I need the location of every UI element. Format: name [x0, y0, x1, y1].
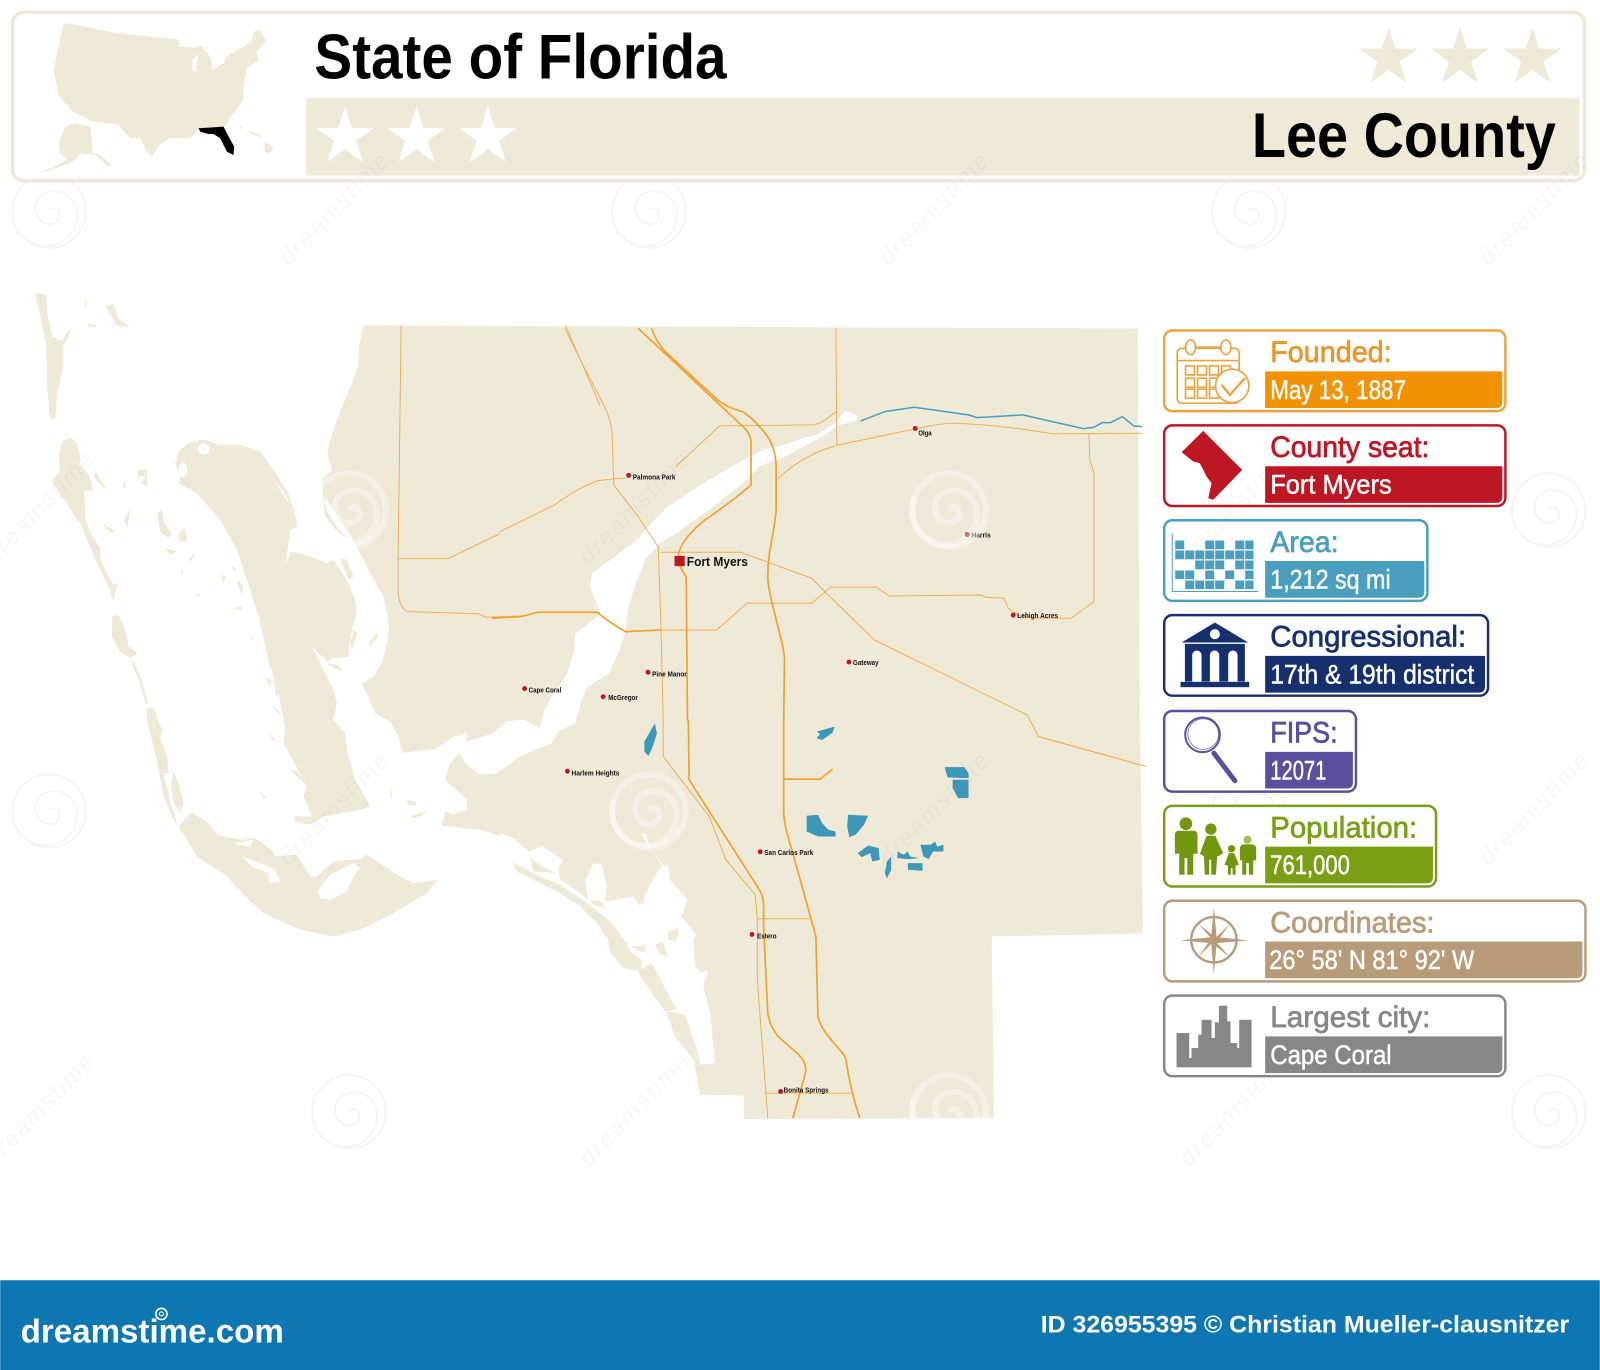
roads west: [398, 325, 600, 617]
city labels: Bonita Springs: [784, 1087, 829, 1095]
icon: calendar: [1177, 340, 1249, 403]
icon: district outline: [1182, 431, 1242, 500]
city labels: Lehigh Acres: [1017, 612, 1058, 620]
panel: Founded: [1164, 331, 1505, 411]
city: Fort Myers: Fort Myers: [687, 554, 748, 569]
stars top right: [1360, 28, 1562, 83]
county map: [35, 293, 1146, 1119]
panel: Coordinates: [1164, 901, 1585, 981]
river: blue upstream: [644, 407, 1142, 756]
value: 1,212 sq mi: [1270, 565, 1391, 595]
panel: Largest city: [1164, 996, 1505, 1076]
value: Cape Coral: [1270, 1040, 1392, 1070]
islands: small keys in Pine Island Sound: [94, 470, 426, 818]
header band: [306, 98, 1579, 175]
infographic: Lee County, Florida: dreamstime: [1174, 445, 1296, 570]
island: Sanibel: [179, 812, 438, 936]
label: Population:: [1270, 812, 1417, 845]
islands: Pine Island and Sound: [52, 437, 426, 828]
infographic: Lee County, Florida: dreamstime: [574, 445, 696, 570]
value: 12071: [1270, 755, 1326, 785]
city labels: Estero: [757, 932, 777, 940]
label: Congressional:: [1270, 621, 1466, 654]
mainland: [323, 325, 1143, 1119]
river: Caloosahatchee: [459, 411, 857, 775]
infographic: Lee County, Florida: dreamstime: [1473, 146, 1596, 271]
city labels: Palmona Park: [633, 473, 676, 481]
panel: FIPS: [1164, 711, 1356, 792]
city labels: Cape Coral: [529, 687, 561, 695]
icon: family: [1175, 817, 1256, 875]
city labels: San Carlos Park: [764, 849, 813, 857]
subtitle: Lee County: [1252, 101, 1556, 171]
panel: Area: [1164, 520, 1427, 601]
city labels: [522, 426, 1058, 1095]
roads north: [492, 328, 1142, 760]
icon: skyline: [1177, 1006, 1252, 1067]
panel: County seat: [1164, 425, 1505, 506]
label: FIPS:: [1270, 717, 1338, 750]
title: State of Florida: [314, 23, 727, 93]
islands: Gasparilla and northern keys: [35, 293, 130, 419]
label: Largest city:: [1270, 1001, 1430, 1034]
city labels: Olga: [918, 430, 932, 438]
islands: Cayo Costa chain: [52, 437, 184, 828]
value: 761,000: [1270, 850, 1350, 880]
panel: Congressional: [1164, 615, 1488, 696]
infographic: Lee County, Florida: dreamstime: [1174, 1047, 1296, 1172]
city labels: Harris: [971, 532, 991, 540]
infographic: Lee County, Florida: dreamstime: [1473, 746, 1596, 871]
header panel: [12, 12, 1584, 181]
icon: magnifying glass: [1185, 717, 1235, 781]
label: County seat:: [1270, 431, 1429, 464]
value: 26° 58' N 81° 92' W: [1269, 945, 1474, 975]
infographic: Lee County, Florida: dreamstime: [274, 746, 396, 871]
city labels: Harlem Heights: [571, 769, 619, 777]
label: Founded:: [1270, 336, 1392, 369]
lakes south: [807, 767, 969, 878]
lakes north: [644, 723, 835, 756]
infographic: Lee County, Florida: dreamstime: [874, 746, 996, 871]
value: May 13, 1887: [1270, 375, 1406, 405]
label: Area:: [1270, 526, 1339, 559]
roads south: [663, 720, 1146, 1118]
value: Fort Myers: [1270, 470, 1392, 500]
icon: USA locator map: [37, 23, 274, 173]
icon: area grid: [1172, 533, 1258, 592]
footer logo: dreamstime.com: [21, 1313, 284, 1350]
footer bar: [0, 1280, 1600, 1370]
city labels: Pine Manor: [652, 670, 687, 678]
city labels: McGregor: [608, 694, 638, 702]
icon: Florida highlighted: [199, 127, 234, 155]
footer credit: ID 326955395 © Christian Mueller-clausnitzer: [1041, 1311, 1570, 1338]
island: Pine Island: [175, 439, 370, 825]
infographic: Lee County, Florida: dreamstime: [574, 1047, 696, 1172]
panel: Population: [1164, 806, 1436, 886]
Estero Bay: [500, 833, 715, 1065]
infographic: Lee County, Florida: dreamstime: [274, 146, 396, 271]
stars in band: [316, 107, 517, 162]
icon: capitol building: [1181, 623, 1249, 687]
city labels: Gateway: [853, 659, 879, 667]
label: Coordinates:: [1270, 906, 1435, 939]
icon: compass rose: [1180, 907, 1248, 975]
infographic: Lee County, Florida: dreamstime: [874, 146, 996, 271]
value: 17th & 19th district: [1270, 659, 1475, 689]
